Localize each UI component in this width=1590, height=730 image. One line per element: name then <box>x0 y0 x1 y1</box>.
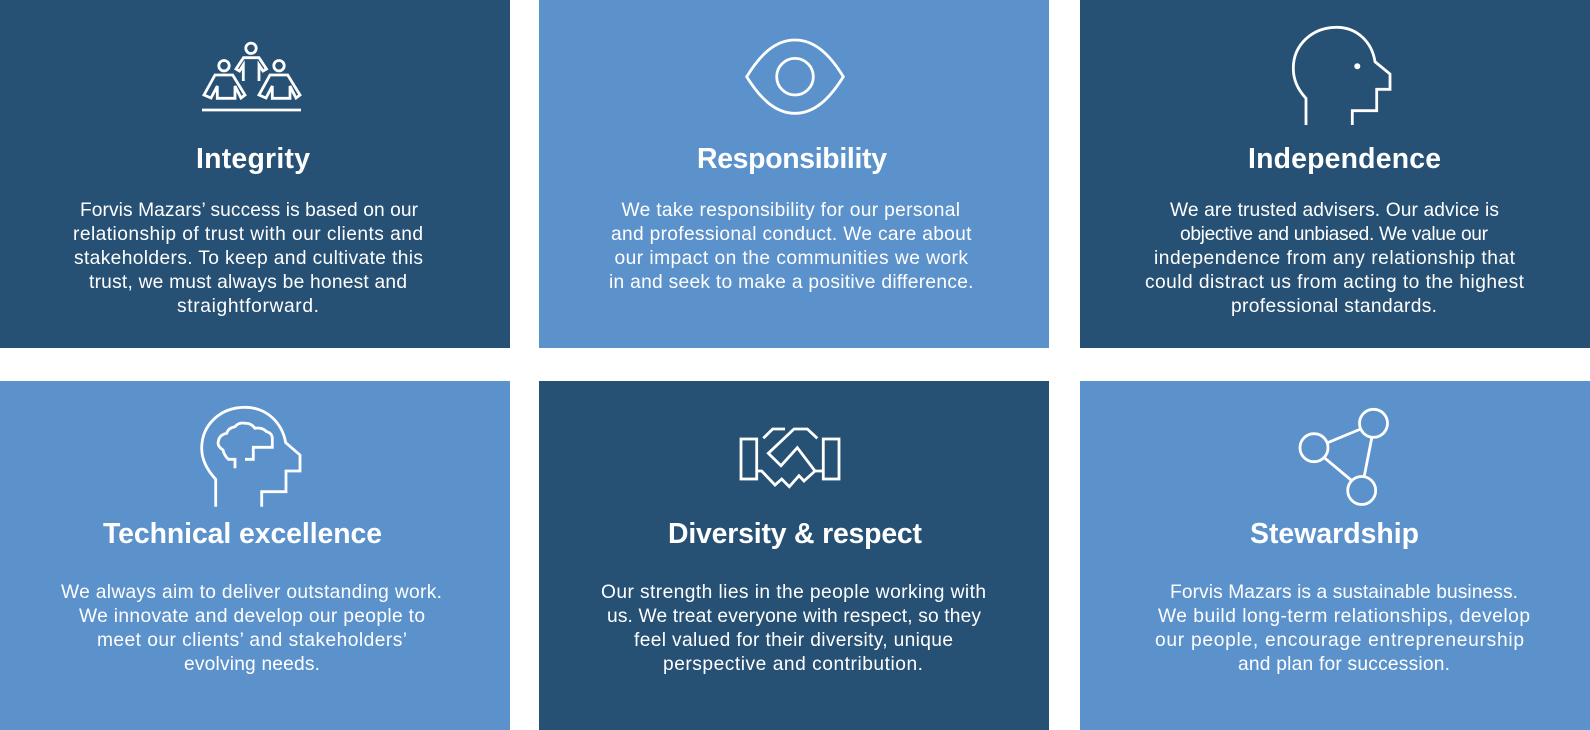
text: independence description: professional standards. <box>1231 296 1437 317</box>
panel: technical excellence <box>0 381 510 730</box>
text: diversity and respect description: perspective and contribution. <box>663 654 923 675</box>
text: independence description: independence from any relationship that <box>1154 248 1516 269</box>
text: technical excellence description: evolving needs. <box>184 654 320 675</box>
text: technical excellence description <box>61 582 442 675</box>
text: stewardship description: Forvis Mazars is a sustainable business. <box>1170 582 1518 603</box>
icon: three people <box>202 43 301 110</box>
icon: eye <box>747 40 843 113</box>
panel: responsibility <box>539 0 1049 348</box>
text: independence description: We are trusted advisers. Our advice is <box>1170 200 1499 221</box>
text: integrity description: relationship of trust with our clients and <box>73 224 423 245</box>
text: stewardship description: and plan for succession. <box>1238 654 1450 675</box>
heading: Responsibility: Responsibility <box>697 143 887 175</box>
text: independence description: could distract us from acting to the highest <box>1145 272 1525 293</box>
text: integrity description: stakeholders. To keep and cultivate this <box>74 248 423 269</box>
text: integrity description: straightforward. <box>177 296 319 317</box>
text: integrity description <box>73 200 423 317</box>
text: technical excellence description: We innovate and develop our people to <box>79 606 425 627</box>
text: responsibility description: our impact on the communities we work <box>614 248 968 269</box>
heading: Diversity & respect: Diversity & respect <box>668 518 923 550</box>
panel: integrity <box>0 0 510 348</box>
panel: diversity and respect <box>539 381 1049 730</box>
text: stewardship description <box>1155 582 1530 675</box>
text: responsibility description: in and seek to make a positive difference. <box>609 272 974 293</box>
heading: Integrity: Integrity <box>196 143 310 175</box>
text: technical excellence description: meet our clients’ and stakeholders’ <box>97 630 407 651</box>
text: integrity description: trust, we must always be honest and <box>89 272 407 293</box>
icon: connected nodes <box>1300 409 1388 504</box>
heading: Technical excellence: Technical excellence <box>103 518 382 550</box>
icon: head with brain <box>202 407 300 507</box>
panel: independence <box>1080 0 1590 348</box>
heading: Independence: Independence <box>1248 143 1441 175</box>
text: stewardship description: our people, encourage entrepreneurship <box>1155 630 1524 651</box>
text: responsibility description <box>609 200 974 293</box>
panel: stewardship <box>1080 381 1590 730</box>
text: responsibility description: and professional conduct. We care about <box>611 224 972 245</box>
text: stewardship description: We build long-term relationships, develop <box>1158 606 1530 627</box>
text: diversity and respect description <box>601 582 986 675</box>
icon: head profile <box>1293 27 1390 125</box>
text: independence description: objective and unbiased. We value our <box>1180 224 1489 245</box>
text: diversity and respect description: Our strength lies in the people working with <box>601 582 986 603</box>
text: diversity and respect description: us. We treat everyone with respect, so they <box>607 606 981 627</box>
icon: handshake <box>741 429 839 487</box>
text: independence description <box>1145 200 1525 317</box>
heading: Stewardship: Stewardship <box>1250 518 1419 550</box>
text: diversity and respect description: feel valued for their diversity, unique <box>634 630 953 651</box>
text: responsibility description: We take responsibility for our personal <box>622 200 960 221</box>
text: integrity description: Forvis Mazars’ success is based on our <box>80 200 419 221</box>
text: technical excellence description: We always aim to deliver outstanding work. <box>61 582 442 603</box>
